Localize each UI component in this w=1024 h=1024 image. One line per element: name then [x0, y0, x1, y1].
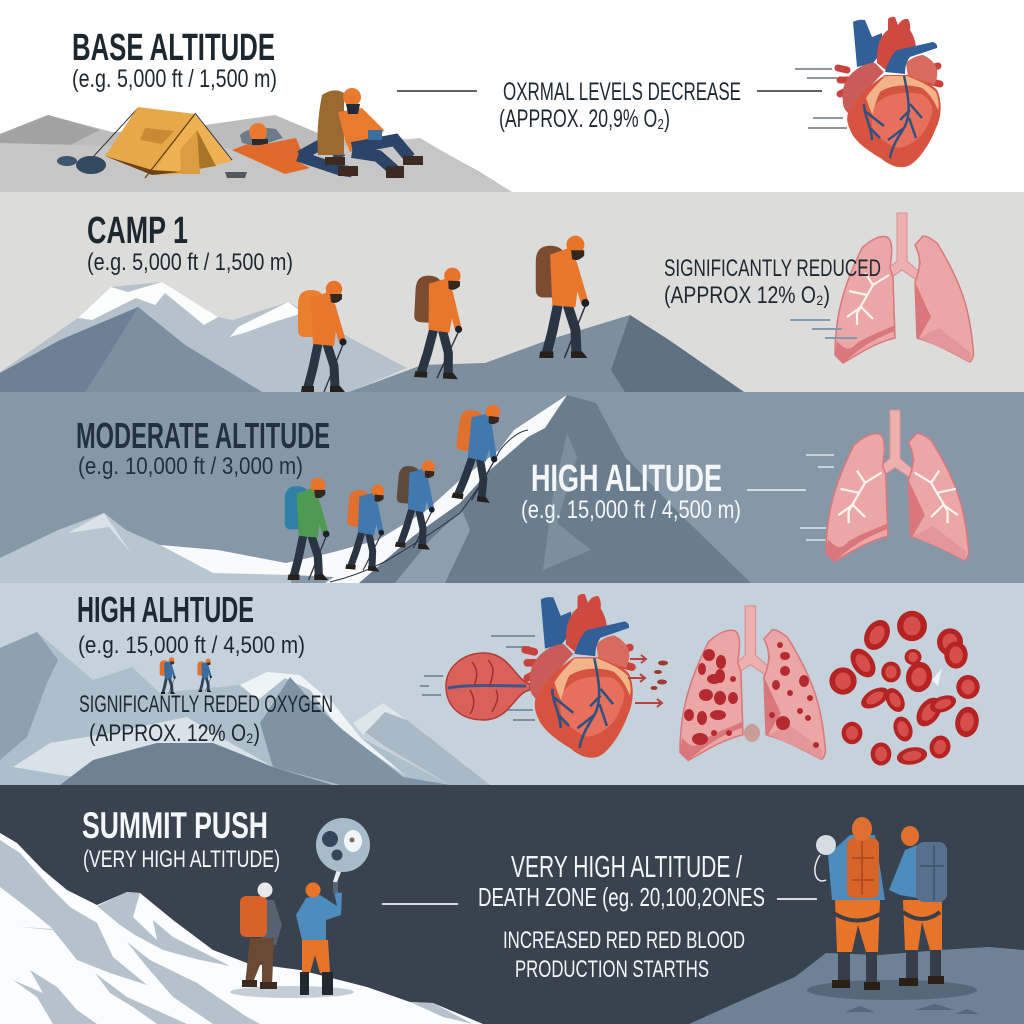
icon: speed lines: [420, 636, 535, 720]
panel: camp 1: [0, 192, 1024, 392]
text: approx 12%: (APPROX. 12% O₂): [89, 720, 260, 747]
icon: speed lines: [790, 320, 857, 338]
panel: summit push: [0, 785, 1024, 1024]
figure: climber with pack: [240, 882, 282, 989]
text: significantly reduced: SIGNIFICANTLY REDUCED: [664, 255, 881, 282]
icon: lungs: [835, 213, 974, 363]
figure: climber sitting with pack: [318, 88, 423, 178]
figure: small climbers: [160, 657, 212, 694]
text: reduced oxygen: SIGNIFICANTLY REDED OXYGEN: [79, 691, 333, 718]
text: approx 12%: (APPROX 12% O₂): [664, 282, 830, 309]
icon: red blood cells: [829, 611, 981, 767]
connector line: [397, 90, 822, 92]
figure: rear climber left: [815, 817, 885, 990]
icon: tent: [57, 107, 247, 178]
text: base altitude elevation: (e.g. 5,000 ft / 1,500 m): [72, 65, 277, 93]
mountains: moderate: [0, 395, 751, 583]
icon: enlarged vessel: [446, 653, 530, 720]
icon: arrows: [628, 655, 668, 707]
icon: oxygen balloon: [316, 818, 370, 882]
icon: speed lines: [795, 69, 847, 128]
text: camp 1 elevation: (e.g. 5,000 ft / 1,500 m): [87, 249, 293, 276]
figure: climber blue orange pack: [343, 482, 388, 572]
mountains: base camp ground: [0, 115, 512, 192]
mountains: high: [0, 632, 490, 785]
figure: climber lead: [449, 400, 505, 503]
text: high elevation: (e.g. 15,000 ft / 4,500 m): [78, 632, 305, 659]
icon: speed lines: [800, 455, 834, 540]
text: very high altitude: (VERY HIGH ALTITUDE): [83, 846, 280, 873]
figure: climber one: [298, 281, 347, 392]
mountains: camp 1: [0, 282, 744, 392]
figure: climber green: [285, 478, 329, 580]
text: death zone: DEATH ZONE (eg. 20,100,2ONES: [478, 882, 765, 912]
figure: climber lying down: [232, 123, 358, 176]
icon: heart: [525, 594, 633, 758]
text: high elevation: (e.g. 15,000 ft / 4,500 m): [521, 496, 741, 524]
panel: moderate altitude: [0, 392, 1024, 583]
text: increased red: INCREASED RED RED BLOOD: [503, 927, 745, 954]
connector line: [747, 489, 806, 491]
connector line: [382, 899, 817, 904]
heading: high altitude: HIGH ALHTUDE: [77, 589, 254, 630]
figure: climber two: [411, 266, 465, 379]
heading: high altitude: HIGH ALITUDE: [531, 458, 722, 500]
icon: lungs: [826, 410, 969, 562]
heading: moderate altitude: MODERATE ALTITUDE: [76, 415, 330, 456]
panel: base altitude: [0, 0, 1024, 192]
text: moderate elevation: (e.g. 10,000 ft / 3,000 m): [78, 453, 303, 480]
panel: high altitude: [0, 583, 1024, 785]
figure: climber three: [536, 236, 589, 358]
heading: summit push: SUMMIT PUSH: [82, 805, 268, 846]
mountains: right ridge: [689, 947, 1024, 1024]
figure: rear climber right: [889, 826, 947, 986]
figure: climber raising device: [296, 880, 342, 995]
text: production starts: PRODUCTION STARTHS: [515, 956, 709, 983]
mountains: snowy slope: [0, 833, 483, 1024]
figure: climber blue brown pack: [392, 458, 439, 550]
heading: very high altitude: VERY HIGH ALTITUDE /: [511, 849, 742, 884]
icon: damaged lungs: [680, 606, 825, 760]
heading: base altitude: BASE ALTITUDE: [72, 27, 275, 69]
heading: camp 1: CAMP 1: [87, 210, 188, 252]
icon: heart: [838, 17, 941, 167]
text: approx 20.9%: (APPROX. 20,9% O₂): [499, 105, 670, 133]
text: oxygen levels: OXRMAL LEVELS DECREASE: [503, 78, 741, 106]
